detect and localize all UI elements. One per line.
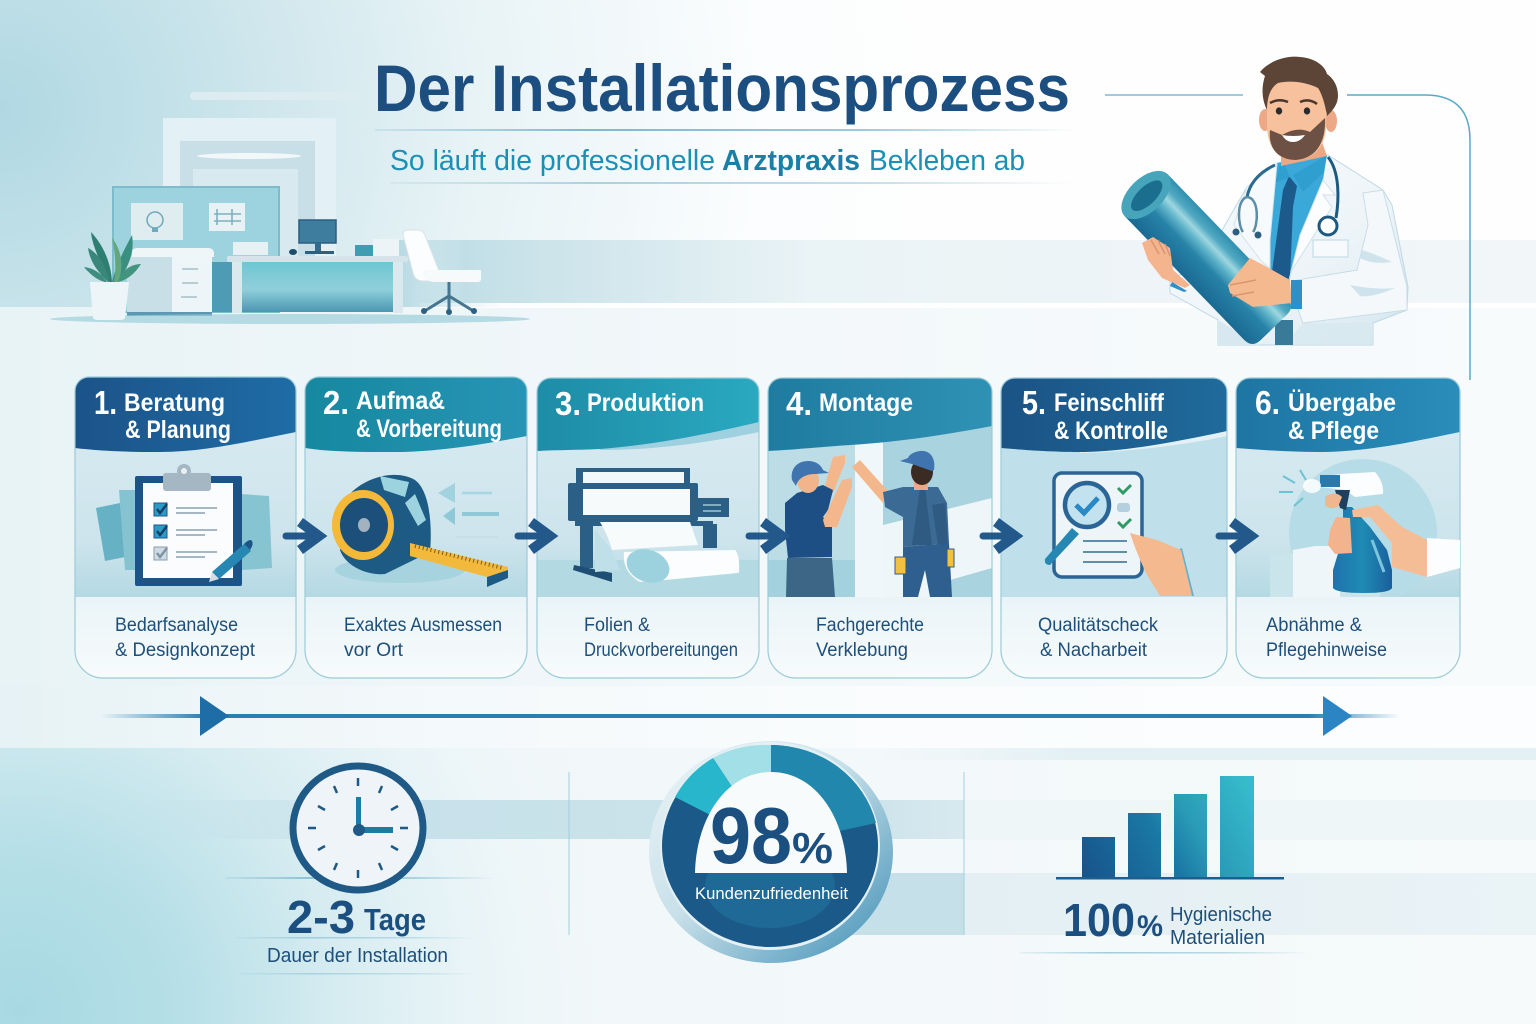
bar chart bbox=[1056, 776, 1284, 880]
icon: workers applying foil bbox=[785, 451, 954, 597]
step 5 title: & Kontrolle bbox=[1054, 417, 1168, 445]
step 4 header bbox=[768, 378, 992, 451]
doctor head bbox=[1259, 57, 1338, 166]
icon: spray bottle in hand bbox=[1279, 470, 1460, 593]
step 4 description: Fachgerechte bbox=[816, 615, 924, 636]
coat sleeve bbox=[1297, 190, 1407, 323]
arrow: step 2 to 3 bbox=[518, 522, 550, 550]
hygiene value: % bbox=[1137, 910, 1163, 943]
step 5 title bbox=[1022, 384, 1168, 445]
step 3 title: 3. bbox=[555, 385, 581, 422]
satisfaction label: Kundenzufriedenheit bbox=[695, 884, 848, 903]
hygiene label: Materialien bbox=[1170, 927, 1265, 949]
step 6 title bbox=[1255, 384, 1396, 445]
step 4 description bbox=[816, 615, 924, 661]
step 2 title: & Vorbereitung bbox=[356, 415, 502, 443]
icon: tape measure bbox=[332, 475, 508, 587]
icon: quality check magnifier bbox=[1045, 473, 1194, 596]
right hand bbox=[1228, 258, 1292, 307]
hygiene label bbox=[1170, 904, 1272, 949]
step 4 title: Montage bbox=[819, 389, 913, 417]
foil roll bbox=[1113, 162, 1295, 348]
icon: clipboard checklist bbox=[96, 464, 272, 586]
step card 1 bbox=[75, 377, 296, 678]
step 3 title: Produktion bbox=[587, 389, 704, 417]
subtitle: Bekleben ab bbox=[869, 145, 1025, 177]
step card 2 bbox=[305, 377, 527, 678]
step 1 title: 1. bbox=[94, 384, 117, 421]
stethoscope bbox=[1232, 157, 1338, 238]
illustration: office reception bbox=[50, 92, 530, 324]
step 1 title: & Planung bbox=[125, 416, 231, 444]
step 5 description bbox=[1038, 615, 1158, 661]
step 2 title bbox=[323, 384, 502, 443]
shirt bbox=[1270, 155, 1327, 270]
step 6 title: & Pflege bbox=[1288, 417, 1379, 445]
step 6 title: Übergabe bbox=[1288, 388, 1396, 417]
step 6 description bbox=[1266, 615, 1387, 661]
title: Der Installationsprozess bbox=[374, 51, 1070, 125]
step card 3 bbox=[537, 378, 759, 678]
illustration: doctor holding foil roll bbox=[1113, 57, 1408, 348]
step 1 header bbox=[75, 377, 296, 452]
stat: installation duration bbox=[225, 766, 495, 974]
step 5 description: Qualitätscheck bbox=[1038, 615, 1158, 636]
step 1 description: & Designkonzept bbox=[115, 640, 256, 661]
step 4 description: Verklebung bbox=[816, 640, 908, 661]
step card 6 bbox=[1236, 378, 1460, 678]
step 3 header bbox=[537, 378, 759, 451]
satisfaction value: % bbox=[792, 824, 833, 873]
step 2 description: vor Ort bbox=[344, 640, 404, 661]
doctor coat bbox=[1170, 155, 1408, 345]
step 6 header bbox=[1236, 378, 1460, 452]
step 6 title: 6. bbox=[1255, 384, 1280, 421]
step 3 description: Folien & bbox=[584, 615, 650, 636]
duration value: 2-3 bbox=[287, 891, 355, 943]
subtitle: So läuft die professionelle bbox=[390, 145, 715, 177]
step 2 title: Aufma& bbox=[356, 387, 445, 415]
subtitle: Arztpraxis bbox=[722, 145, 860, 177]
timeline arrow bbox=[100, 696, 1400, 736]
arrow: step 5 to 6 bbox=[1219, 522, 1251, 550]
step 2 description: Exaktes Ausmessen bbox=[344, 615, 502, 636]
arrow: step 4 to 5 bbox=[983, 522, 1015, 550]
satisfaction value: 98 bbox=[710, 791, 792, 880]
step 3 description: Druckvorbereitungen bbox=[584, 640, 738, 661]
step 1 description bbox=[115, 615, 256, 661]
arrow: step 3 to 4 bbox=[749, 522, 782, 550]
hygiene label: Hygienische bbox=[1170, 904, 1272, 926]
step 1 title: Beratung bbox=[124, 389, 225, 417]
tie bbox=[1272, 176, 1297, 280]
step 5 header bbox=[1001, 378, 1227, 452]
left hand bbox=[1142, 237, 1190, 288]
step 2 title: 2. bbox=[323, 384, 349, 421]
step card 4 bbox=[768, 378, 992, 678]
step 1 title bbox=[94, 384, 231, 444]
step card 5 bbox=[1001, 378, 1227, 678]
step 6 description: Abnähme & bbox=[1266, 615, 1362, 636]
coat lapel bbox=[1289, 180, 1335, 280]
arrow: step 1 to 2 bbox=[286, 522, 319, 550]
hygiene value: 100 bbox=[1063, 894, 1135, 946]
step 3 description bbox=[584, 615, 738, 661]
step 2 description bbox=[344, 615, 502, 661]
duration value: Tage bbox=[364, 902, 426, 937]
step 5 title: Feinschliff bbox=[1054, 389, 1165, 417]
icon: clock bbox=[293, 766, 423, 890]
step 5 description: & Nacharbeit bbox=[1040, 640, 1148, 661]
step 6 description: Pflegehinweise bbox=[1266, 640, 1387, 661]
step 4 title: 4. bbox=[786, 385, 812, 422]
duration label: Dauer der Installation bbox=[267, 945, 448, 967]
subtitle bbox=[390, 145, 1025, 177]
icon: large format printer bbox=[568, 468, 739, 589]
step 4 title bbox=[786, 385, 913, 422]
step 1 description: Bedarfsanalyse bbox=[115, 615, 238, 636]
stat: customer satisfaction gauge bbox=[649, 741, 893, 963]
step 2 header bbox=[305, 377, 527, 452]
duration value bbox=[287, 891, 426, 943]
stat: hygienic materials bbox=[1020, 776, 1310, 954]
step 5 title: 5. bbox=[1022, 384, 1046, 421]
step 3 title bbox=[555, 385, 704, 422]
